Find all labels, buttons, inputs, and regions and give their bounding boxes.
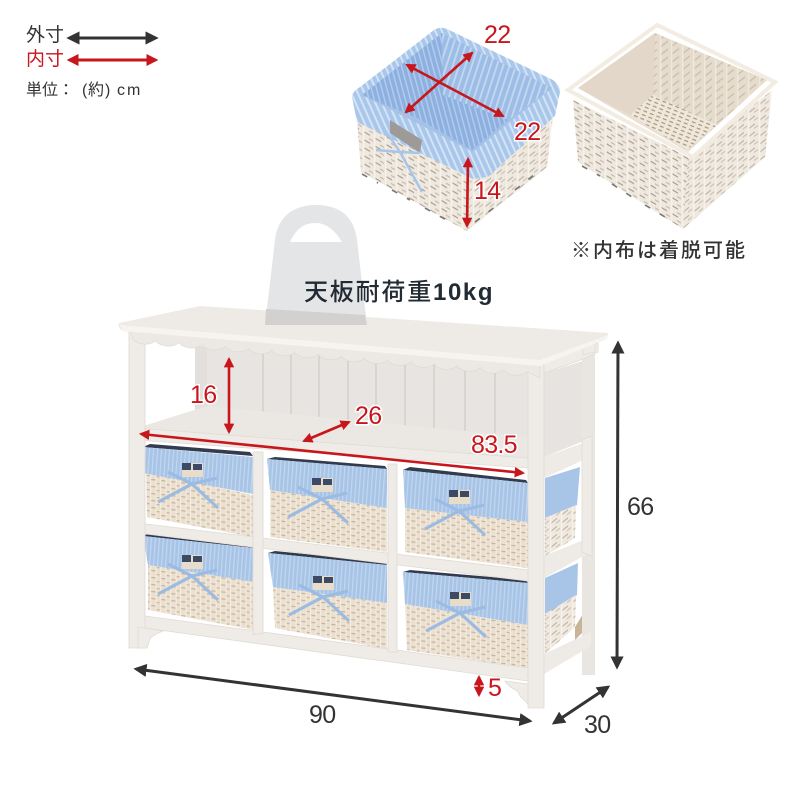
dimension numbers: 26	[355, 402, 381, 430]
basket with blue liner	[352, 28, 560, 231]
legend: outer and inner dimensions	[26, 24, 156, 99]
legend: outer and inner dimensions: 単位：	[26, 82, 74, 99]
dimension numbers: 14	[474, 177, 501, 205]
icon: weight	[265, 205, 367, 325]
basket without liner	[568, 25, 775, 229]
table top	[118, 306, 608, 366]
dimension numbers: 30	[584, 711, 610, 739]
dimension arrows: inner	[141, 53, 523, 695]
dimension numbers: 90	[309, 701, 335, 729]
legend: outer and inner dimensions: 内寸	[26, 48, 64, 70]
right side baskets	[545, 467, 583, 654]
note: liner is removable: ※内布は着脱可能	[571, 239, 747, 262]
back panel with planks	[195, 342, 528, 440]
legend: outer and inner dimensions: 約	[88, 81, 104, 99]
legend: outer and inner dimensions: )	[105, 82, 110, 99]
legend: outer and inner dimensions: (	[82, 82, 88, 99]
basket row 1	[143, 444, 528, 568]
dimension numbers	[190, 21, 653, 739]
load capacity label: 天板耐荷重10kg	[304, 279, 494, 306]
legend: outer and inner dimensions: 外寸	[26, 24, 64, 46]
dimension numbers: 66	[627, 493, 653, 521]
scalloped apron	[130, 330, 540, 378]
dimension numbers: 5	[488, 674, 501, 702]
basket row 2	[143, 533, 528, 668]
right side inner panel	[544, 360, 586, 457]
middle shelf surface	[137, 406, 528, 458]
dimension numbers: 83.5	[471, 431, 517, 459]
frame	[129, 332, 598, 708]
dimension numbers: 16	[190, 381, 216, 409]
back right leg	[582, 340, 595, 675]
dimension numbers: 22	[514, 118, 540, 146]
side rails	[544, 440, 592, 674]
dimension arrows: outer	[136, 343, 618, 723]
legend: outer and inner dimensions: cm	[117, 82, 142, 99]
weight icon overlap on table top	[265, 309, 367, 325]
shelf unit	[118, 306, 608, 708]
dimension numbers: 22	[484, 21, 510, 49]
